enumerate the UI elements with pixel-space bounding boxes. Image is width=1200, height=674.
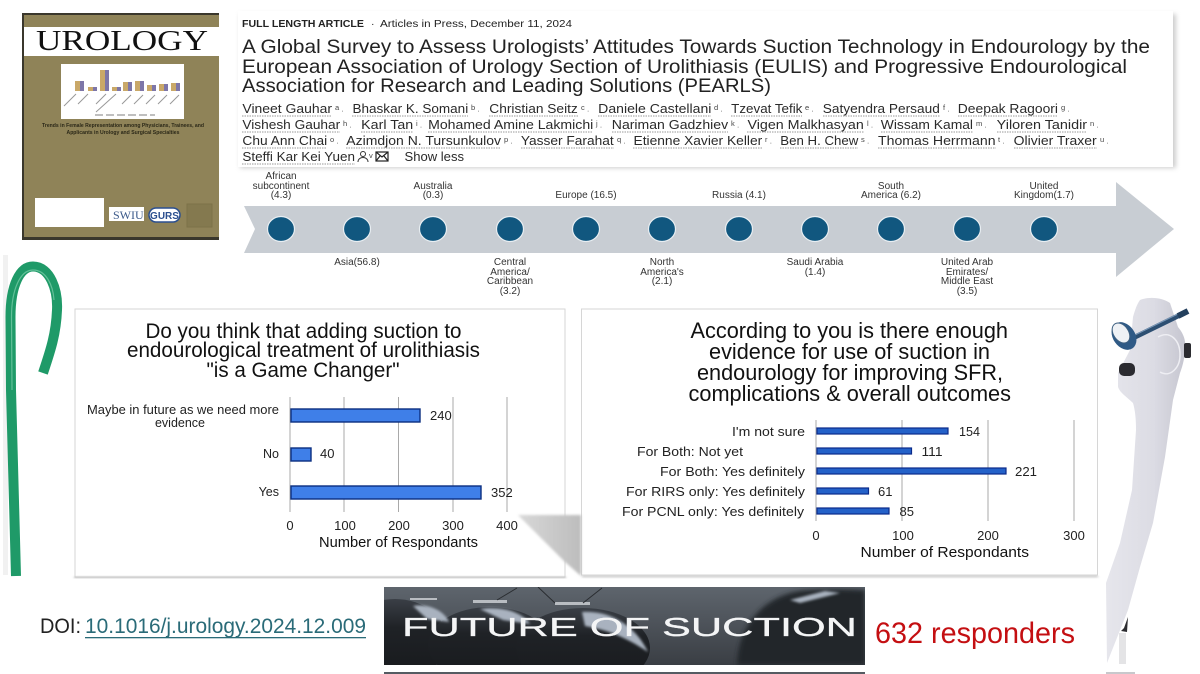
DOI citation: 10.1016/j.urology.2024.12.009 bbox=[85, 615, 366, 638]
author list: · bbox=[718, 106, 723, 115]
author list: Karl Tan bbox=[361, 117, 413, 132]
author list: · bbox=[508, 138, 513, 147]
scope knob bbox=[1106, 317, 1142, 355]
timeline labels below: Middle East bbox=[941, 276, 993, 287]
author list: m bbox=[976, 119, 982, 128]
banner: future of suction bbox=[384, 587, 865, 665]
timeline labels above: Kingdom(1.7) bbox=[1014, 190, 1074, 201]
author list: · bbox=[768, 138, 772, 147]
author list: Deepak Ragoori bbox=[958, 101, 1058, 116]
author list: Olivier Traxer bbox=[1014, 133, 1097, 148]
author list: v bbox=[369, 151, 373, 160]
scope buttons bbox=[1119, 343, 1191, 376]
article title bbox=[242, 36, 1150, 97]
author list: Daniele Castellani bbox=[598, 101, 712, 116]
author list: Yiloren Tanidir bbox=[997, 117, 1088, 132]
category labels bbox=[87, 403, 279, 499]
panel bottom shadows bbox=[74, 576, 1098, 578]
cover caption: Trends in Female Representation among Physicians, Trainees, and bbox=[42, 123, 204, 129]
bar: RIRS bbox=[817, 484, 892, 499]
timeline labels below bbox=[334, 257, 994, 297]
timeline labels above: (4.3) bbox=[271, 190, 291, 201]
author list: b bbox=[471, 103, 475, 112]
author list: Satyendra Persaud bbox=[823, 101, 940, 116]
article type and date: FULL LENGTH ARTICLE bbox=[242, 18, 364, 30]
category labels bbox=[622, 424, 806, 519]
author list: r bbox=[765, 135, 768, 144]
author list: c bbox=[581, 103, 585, 112]
article shadow bbox=[240, 14, 1176, 168]
article title: A Global Survey to Assess Urologists’ Attitudes Towards Suction Technology in Endourology by the bbox=[242, 36, 1150, 58]
author list: · bbox=[598, 122, 602, 131]
author list: Vineet Gauhar bbox=[242, 101, 333, 116]
chart title: evidence for use of suction in bbox=[709, 339, 990, 364]
author list: Christian Seitz bbox=[489, 101, 578, 116]
author list: h bbox=[343, 119, 347, 128]
author list bbox=[242, 101, 1109, 164]
timeline labels below: (3.5) bbox=[957, 286, 977, 297]
author list: i bbox=[416, 119, 418, 128]
timeline labels below: (2.1) bbox=[652, 276, 672, 287]
callout: responders count: 632 responders bbox=[875, 617, 1075, 650]
author list: · bbox=[735, 122, 739, 131]
timeline labels above: (0.3) bbox=[423, 190, 443, 201]
x axis ticks: 200 bbox=[977, 528, 999, 543]
timeline labels above: subcontinent bbox=[253, 181, 310, 192]
article title: European Association of Urology Section of Urolithiasis (EULIS) and Progressive Endourological bbox=[242, 56, 1127, 78]
timeline labels below: Asia(56.8) bbox=[334, 257, 380, 268]
bar: yes: 352 bbox=[491, 485, 513, 500]
author list: k bbox=[731, 119, 735, 128]
banner lower strip bbox=[384, 672, 865, 674]
bar: not sure: 154 bbox=[959, 424, 980, 439]
author list: · bbox=[945, 106, 950, 115]
author list: · bbox=[982, 122, 987, 131]
illustration: green ureteral stent bbox=[3, 255, 57, 576]
logo: SWIU: SWIU bbox=[113, 208, 144, 222]
chart title: Do you think that adding suction to bbox=[146, 320, 462, 343]
chart title: According to you is there enough bbox=[690, 318, 1008, 343]
timeline labels below: America/ bbox=[490, 267, 530, 278]
x axis ticks bbox=[812, 528, 1085, 543]
author list: · bbox=[347, 122, 352, 131]
x axis ticks: 200 bbox=[388, 518, 410, 533]
timeline dots bbox=[268, 216, 1058, 242]
author list: Vigen Malkhasyan bbox=[748, 117, 864, 132]
bar: yes bbox=[291, 485, 513, 500]
panel: game changer chart bbox=[75, 309, 565, 577]
bar chart bbox=[622, 420, 1085, 561]
timeline labels above bbox=[253, 171, 1074, 201]
author list: a bbox=[335, 103, 340, 112]
author list: Tzevat Tefik bbox=[731, 101, 803, 116]
author list: · bbox=[475, 106, 480, 115]
category labels: I'm not sure bbox=[732, 424, 805, 439]
x axis ticks: 300 bbox=[1063, 528, 1085, 543]
bar: both yes bbox=[817, 464, 1037, 479]
bar: PCNL: 85 bbox=[900, 504, 914, 519]
category labels: For RIRS only: Yes definitely bbox=[626, 484, 806, 499]
x axis ticks: 100 bbox=[334, 518, 356, 533]
author list: Wissam Kamal bbox=[881, 117, 973, 132]
timeline labels above: Australia bbox=[414, 181, 453, 192]
article type and date: · bbox=[371, 18, 374, 30]
chart title: endourological treatment of urolithiasis bbox=[127, 339, 480, 362]
category labels: For Both: Yes definitely bbox=[660, 464, 806, 479]
author list: Thomas Herrmann bbox=[878, 133, 996, 148]
logo: GURS: GURS bbox=[150, 211, 179, 222]
article type and date bbox=[242, 18, 572, 30]
journal cover bbox=[22, 13, 219, 240]
author list: · bbox=[869, 122, 873, 131]
category labels: evidence bbox=[155, 416, 205, 430]
author list: · bbox=[1094, 122, 1099, 131]
x axis ticks: 400 bbox=[496, 518, 518, 533]
timeline labels below: (1.4) bbox=[805, 267, 825, 278]
author list: e bbox=[805, 103, 809, 112]
cover caption: Applicants in Urology and Surgical Specialties bbox=[66, 130, 180, 136]
author list: t bbox=[998, 135, 1001, 144]
article type and date: Articles in Press, December 11, 2024 bbox=[380, 18, 572, 30]
author list: l bbox=[867, 119, 869, 128]
x axis ticks: 0 bbox=[286, 518, 294, 533]
author list: · bbox=[621, 138, 626, 147]
timeline labels above: African bbox=[265, 171, 297, 182]
panel: evidence chart bbox=[582, 309, 1098, 575]
author list: Etienne Xavier Keller bbox=[634, 133, 763, 148]
author list: Show less bbox=[404, 149, 465, 164]
bar: both yes: 221 bbox=[1015, 464, 1037, 479]
author list: Ben H. Chew bbox=[780, 133, 859, 148]
author list: f bbox=[943, 103, 946, 112]
chart title: "is a Game Changer" bbox=[206, 359, 400, 382]
cover title: UROLOGY: UROLOGY bbox=[36, 25, 208, 57]
timeline labels above: Russia (4.1) bbox=[712, 190, 766, 201]
chart title bbox=[127, 320, 480, 382]
author list: · bbox=[1000, 138, 1005, 147]
icon: person bbox=[358, 152, 368, 162]
author list: u bbox=[1100, 135, 1104, 144]
author list: · bbox=[418, 122, 422, 131]
x axis title: Number of Respondants bbox=[860, 545, 1029, 561]
author list: Chu Ann Chai bbox=[242, 133, 327, 148]
timeline labels above: America (6.2) bbox=[861, 190, 921, 201]
bar chart bbox=[87, 397, 518, 551]
bar: PCNL bbox=[817, 504, 914, 519]
author list: o bbox=[330, 135, 334, 144]
author list: g bbox=[1061, 103, 1065, 112]
chart title bbox=[688, 318, 1011, 406]
bar: maybe in future: 240 bbox=[430, 408, 452, 423]
bar: no: 40 bbox=[320, 446, 334, 461]
author list: Nariman Gadzhiev bbox=[612, 117, 729, 132]
timeline labels above: Europe (16.5) bbox=[555, 190, 617, 201]
author list: Yasser Farahat bbox=[521, 133, 614, 148]
cover caption bbox=[42, 123, 204, 136]
timeline labels below: America's bbox=[640, 267, 684, 278]
author list: n bbox=[1090, 119, 1094, 128]
category labels: For PCNL only: Yes definitely bbox=[622, 504, 805, 519]
author list: · bbox=[339, 106, 344, 115]
author list: · bbox=[1065, 106, 1070, 115]
author list: · bbox=[865, 138, 869, 147]
timeline labels below: Central bbox=[494, 257, 526, 268]
category labels: No bbox=[263, 447, 279, 461]
DOI citation: DOI: bbox=[40, 615, 81, 638]
chart title: complications & overall outcomes bbox=[688, 381, 1011, 406]
author list: Azimdjon N. Tursunkulov bbox=[346, 133, 502, 148]
timeline labels below: United Arab bbox=[941, 257, 994, 268]
bar: RIRS: 61 bbox=[878, 484, 892, 499]
timeline arrow bbox=[244, 171, 1174, 297]
bar: maybe in future bbox=[291, 408, 452, 423]
timeline labels below: North bbox=[650, 257, 674, 268]
author list: · bbox=[334, 138, 339, 147]
author list: d bbox=[714, 103, 718, 112]
x axis ticks bbox=[286, 518, 518, 533]
x axis ticks: 300 bbox=[442, 518, 464, 533]
author list: Vishesh Gauhar bbox=[242, 117, 341, 132]
timeline labels below: Saudi Arabia bbox=[787, 257, 844, 268]
timeline labels above: South bbox=[878, 181, 904, 192]
x axis ticks: 100 bbox=[892, 528, 914, 543]
category labels: For Both: Not yet bbox=[637, 444, 743, 459]
author list: Bhaskar K. Somani bbox=[352, 101, 468, 116]
author list: Steffi Kar Kei Yuen bbox=[242, 149, 355, 164]
cover chart bbox=[61, 64, 184, 119]
author list: · bbox=[585, 106, 589, 115]
author list: p bbox=[504, 135, 508, 144]
timeline labels below: Caribbean bbox=[487, 276, 533, 287]
banner heading: FUTURE OF SUCTION bbox=[402, 614, 857, 642]
author list: s bbox=[861, 135, 865, 144]
x axis ticks: 0 bbox=[812, 528, 820, 543]
author list: j bbox=[595, 119, 598, 128]
cover white box bbox=[35, 198, 104, 227]
scope port tube bbox=[1133, 311, 1188, 338]
bar: not sure bbox=[817, 424, 980, 439]
author list: · bbox=[1104, 138, 1109, 147]
category labels: Yes bbox=[259, 485, 279, 499]
panel: article header bbox=[238, 11, 1173, 167]
author list: Mohamed Amine Lakmichi bbox=[428, 117, 593, 132]
timeline labels below: (3.2) bbox=[500, 286, 520, 297]
icon: envelope bbox=[376, 152, 388, 161]
bar: no bbox=[291, 446, 334, 461]
logo: publisher bbox=[187, 204, 212, 227]
chart title: endourology for improving SFR, bbox=[697, 360, 1003, 385]
x axis title: Number of Respondants bbox=[319, 535, 478, 551]
timeline labels above: United bbox=[1030, 181, 1058, 192]
timeline labels below: Emirates/ bbox=[946, 267, 988, 278]
bar: both not yet bbox=[817, 444, 942, 459]
bar: both not yet: 111 bbox=[922, 444, 942, 459]
shadow wedge between panels bbox=[518, 515, 581, 576]
illustration: ureteroscope handle bbox=[1106, 298, 1191, 674]
article title: Association for Research and Leading Solutions (PEARLS) bbox=[242, 75, 771, 97]
author list: · bbox=[809, 106, 814, 115]
author list: q bbox=[617, 135, 621, 144]
category labels: Maybe in future as we need more bbox=[87, 403, 279, 417]
